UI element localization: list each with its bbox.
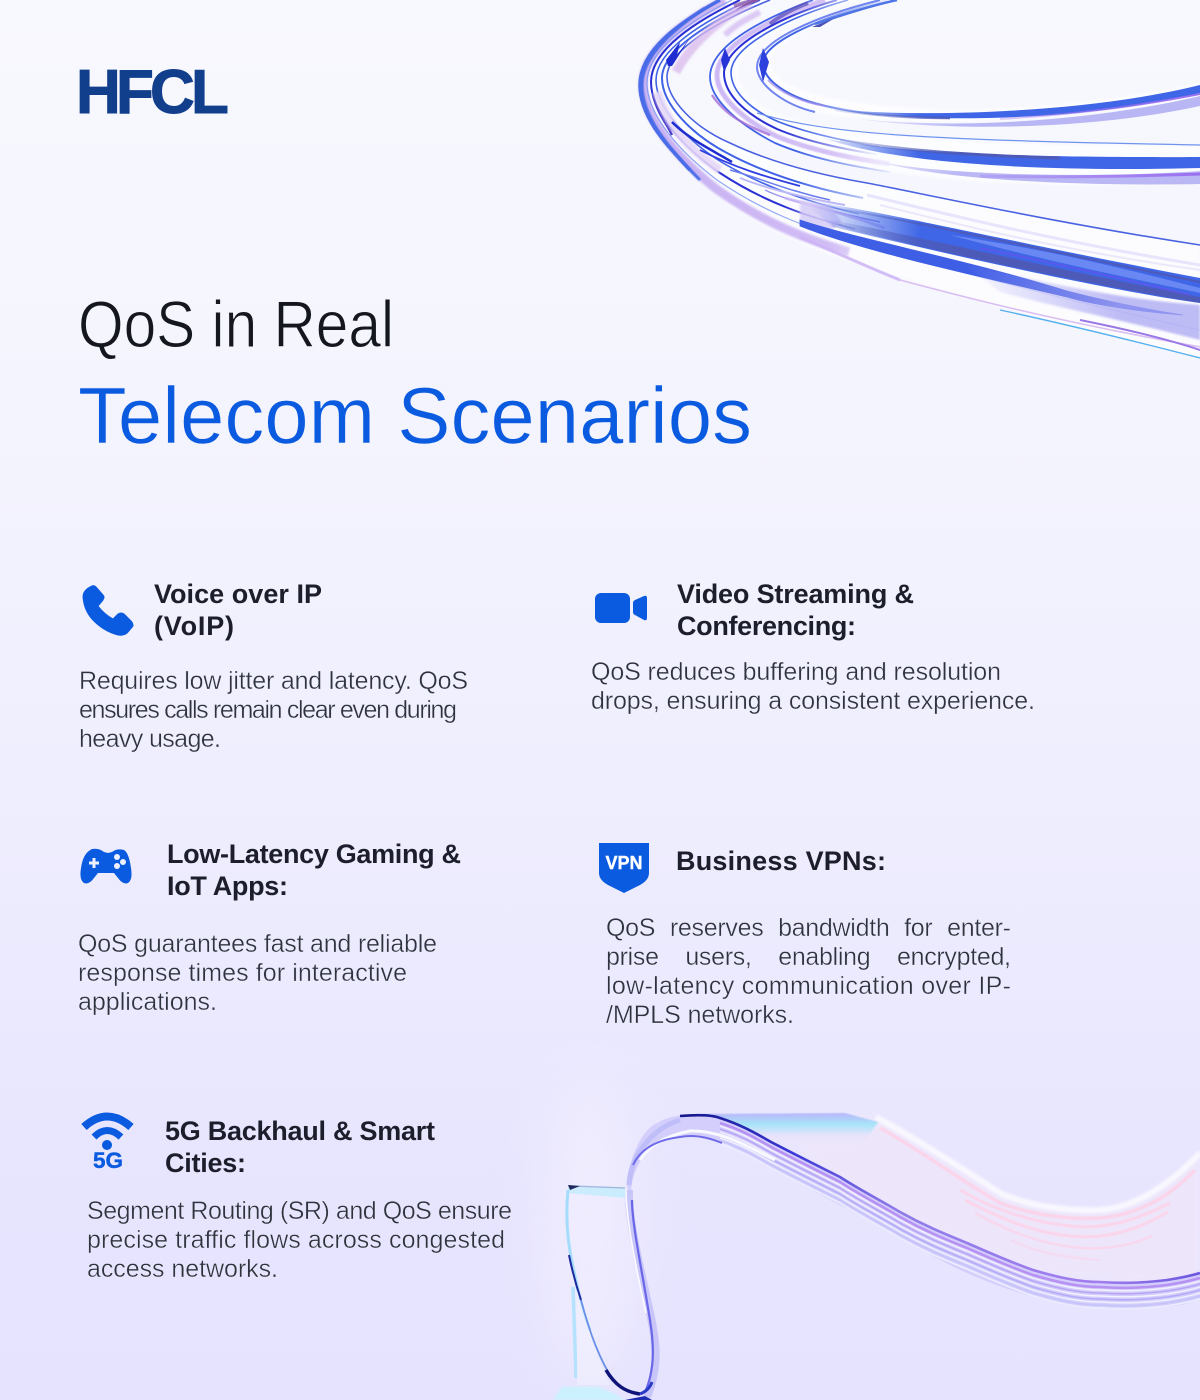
heading: IoT Apps:: [167, 871, 288, 901]
heading: (VoIP): [154, 611, 234, 641]
description: QoS guarantees fast and reliable: [78, 930, 437, 958]
icon: 5G wifi: [84, 1116, 131, 1173]
panel: voice over IP: [79, 579, 468, 753]
heading: Low-Latency Gaming &: [167, 839, 461, 869]
decorative glass ribbon: top right: [640, 0, 1200, 358]
description: low-latency communication over IP-: [606, 972, 1011, 1000]
description: QoS reduces buffering and resolution: [591, 658, 1001, 686]
description: [79, 667, 468, 753]
description: applications.: [78, 988, 217, 1016]
description: [87, 1197, 512, 1283]
description: drops, ensuring a consistent experience.: [591, 687, 1035, 715]
heading: Voice over IP: [154, 579, 322, 609]
description: QoS reserves bandwidth for enter-: [606, 914, 1011, 942]
description: /MPLS networks.: [606, 1001, 794, 1029]
icon: VPN shield: VPN: [605, 853, 643, 873]
description: response times for interactive: [78, 959, 407, 987]
heading: Cities:: [165, 1148, 246, 1178]
title line 2: Telecom Scenarios: [78, 371, 752, 460]
panel: video streaming: [591, 579, 1035, 715]
decorative glass ribbon: bottom right: [545, 1080, 1200, 1400]
heading: [154, 579, 322, 641]
heading: 5G Backhaul & Smart: [165, 1116, 435, 1146]
icon: game controller: [80, 849, 132, 883]
panel: business VPNs: [599, 843, 1011, 1029]
description: [78, 930, 437, 1016]
icon: phone: [83, 586, 133, 635]
description: [591, 658, 1035, 715]
description: access networks.: [87, 1255, 278, 1283]
icon: VPN shield: [599, 843, 649, 893]
heading: [167, 839, 461, 901]
heading: Business VPNs:: [676, 846, 886, 876]
icon: 5G wifi: 5G: [93, 1148, 123, 1173]
description: prise users, enabling encrypted,: [606, 943, 1011, 971]
heading: [165, 1116, 435, 1178]
description: ensures calls remain clear even during: [79, 696, 457, 724]
panel: 5G backhaul: [84, 1116, 512, 1283]
description: Requires low jitter and latency. QoS: [79, 667, 468, 695]
icon: video camera: [595, 593, 647, 623]
title line 1: QoS in Real: [78, 287, 394, 361]
description: Segment Routing (SR) and QoS ensure: [87, 1197, 512, 1225]
heading: [677, 579, 914, 641]
description: [606, 914, 1011, 1029]
description: heavy usage.: [79, 725, 221, 753]
description: precise traffic flows across congested: [87, 1226, 505, 1254]
title: [78, 287, 752, 460]
panel: gaming and IoT: [78, 839, 461, 1016]
heading: Video Streaming &: [677, 579, 914, 609]
logo: HFCL: HFCL: [76, 58, 229, 127]
heading: Conferencing:: [677, 611, 856, 641]
